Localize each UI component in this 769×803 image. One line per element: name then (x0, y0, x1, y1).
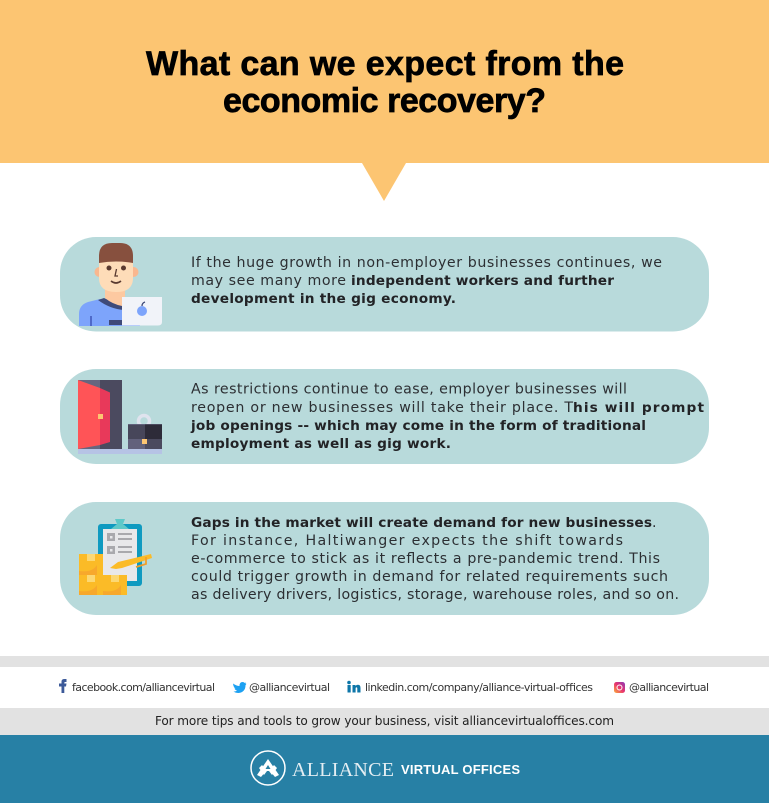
tips band: For more tips and tools to grow your business, visit alliancevirtualoffices.com (155, 714, 614, 728)
brand tagline: VIRTUAL OFFICES (401, 762, 520, 777)
icon: instagram (614, 682, 625, 693)
text block: reopen or new businesses will take their place. T (191, 400, 573, 416)
text block: If the huge growth in non-employer businesses continues, we (191, 255, 662, 271)
facebook link: facebook.com/alliancevirtual (72, 681, 215, 694)
text block: . (652, 515, 657, 531)
text block: independent workers and further (351, 273, 614, 289)
text block: For instance, Haltiwanger expects the shift towards (191, 533, 623, 549)
icon: man with laptop (79, 243, 162, 326)
text block: e-commerce to stick as it reflects a pre-pandemic trend. This (191, 551, 660, 567)
header banner (0, 0, 769, 201)
text block (190, 382, 704, 452)
tips band (0, 708, 769, 735)
title: What can we expect from the (146, 45, 624, 83)
text block: his will prompt (573, 400, 704, 416)
text block: could trigger growth in demand for related requirements such (191, 569, 668, 585)
text block: as delivery drivers, logistics, storage, warehouse roles, and so on. (191, 587, 679, 603)
icon: door and briefcase (78, 380, 162, 454)
text block: As restrictions continue to ease, employer businesses will (191, 382, 627, 398)
panel: market gaps (60, 502, 709, 615)
panel: independent workers (60, 237, 709, 332)
social links row (59, 679, 709, 694)
text block: job openings -- which may come in the form of traditional (190, 418, 646, 434)
text block: employment as well as gig work. (191, 436, 451, 452)
linkedin link: linkedin.com/company/alliance-virtual-offices (365, 681, 593, 694)
instagram handle: @alliancevirtual (629, 681, 709, 694)
twitter handle: @alliancevirtual (249, 681, 330, 694)
brand name: ALLIANCE (292, 759, 394, 781)
icon: linkedin (347, 681, 360, 692)
text block: development in the gig economy. (191, 291, 456, 307)
divider band (0, 656, 769, 667)
title: economic recovery? (223, 82, 546, 120)
footer brand bar (0, 735, 769, 803)
title (146, 45, 624, 120)
icon: twitter (233, 682, 246, 693)
icon: facebook (59, 679, 66, 693)
panel: reopening employers (60, 369, 709, 464)
text block (191, 255, 662, 307)
logo mark (251, 751, 285, 785)
text block (191, 515, 679, 603)
icon: clipboard and boxes (79, 519, 152, 595)
text block: may see many more (191, 273, 346, 289)
text block: Gaps in the market will create demand for new businesses (191, 515, 652, 531)
